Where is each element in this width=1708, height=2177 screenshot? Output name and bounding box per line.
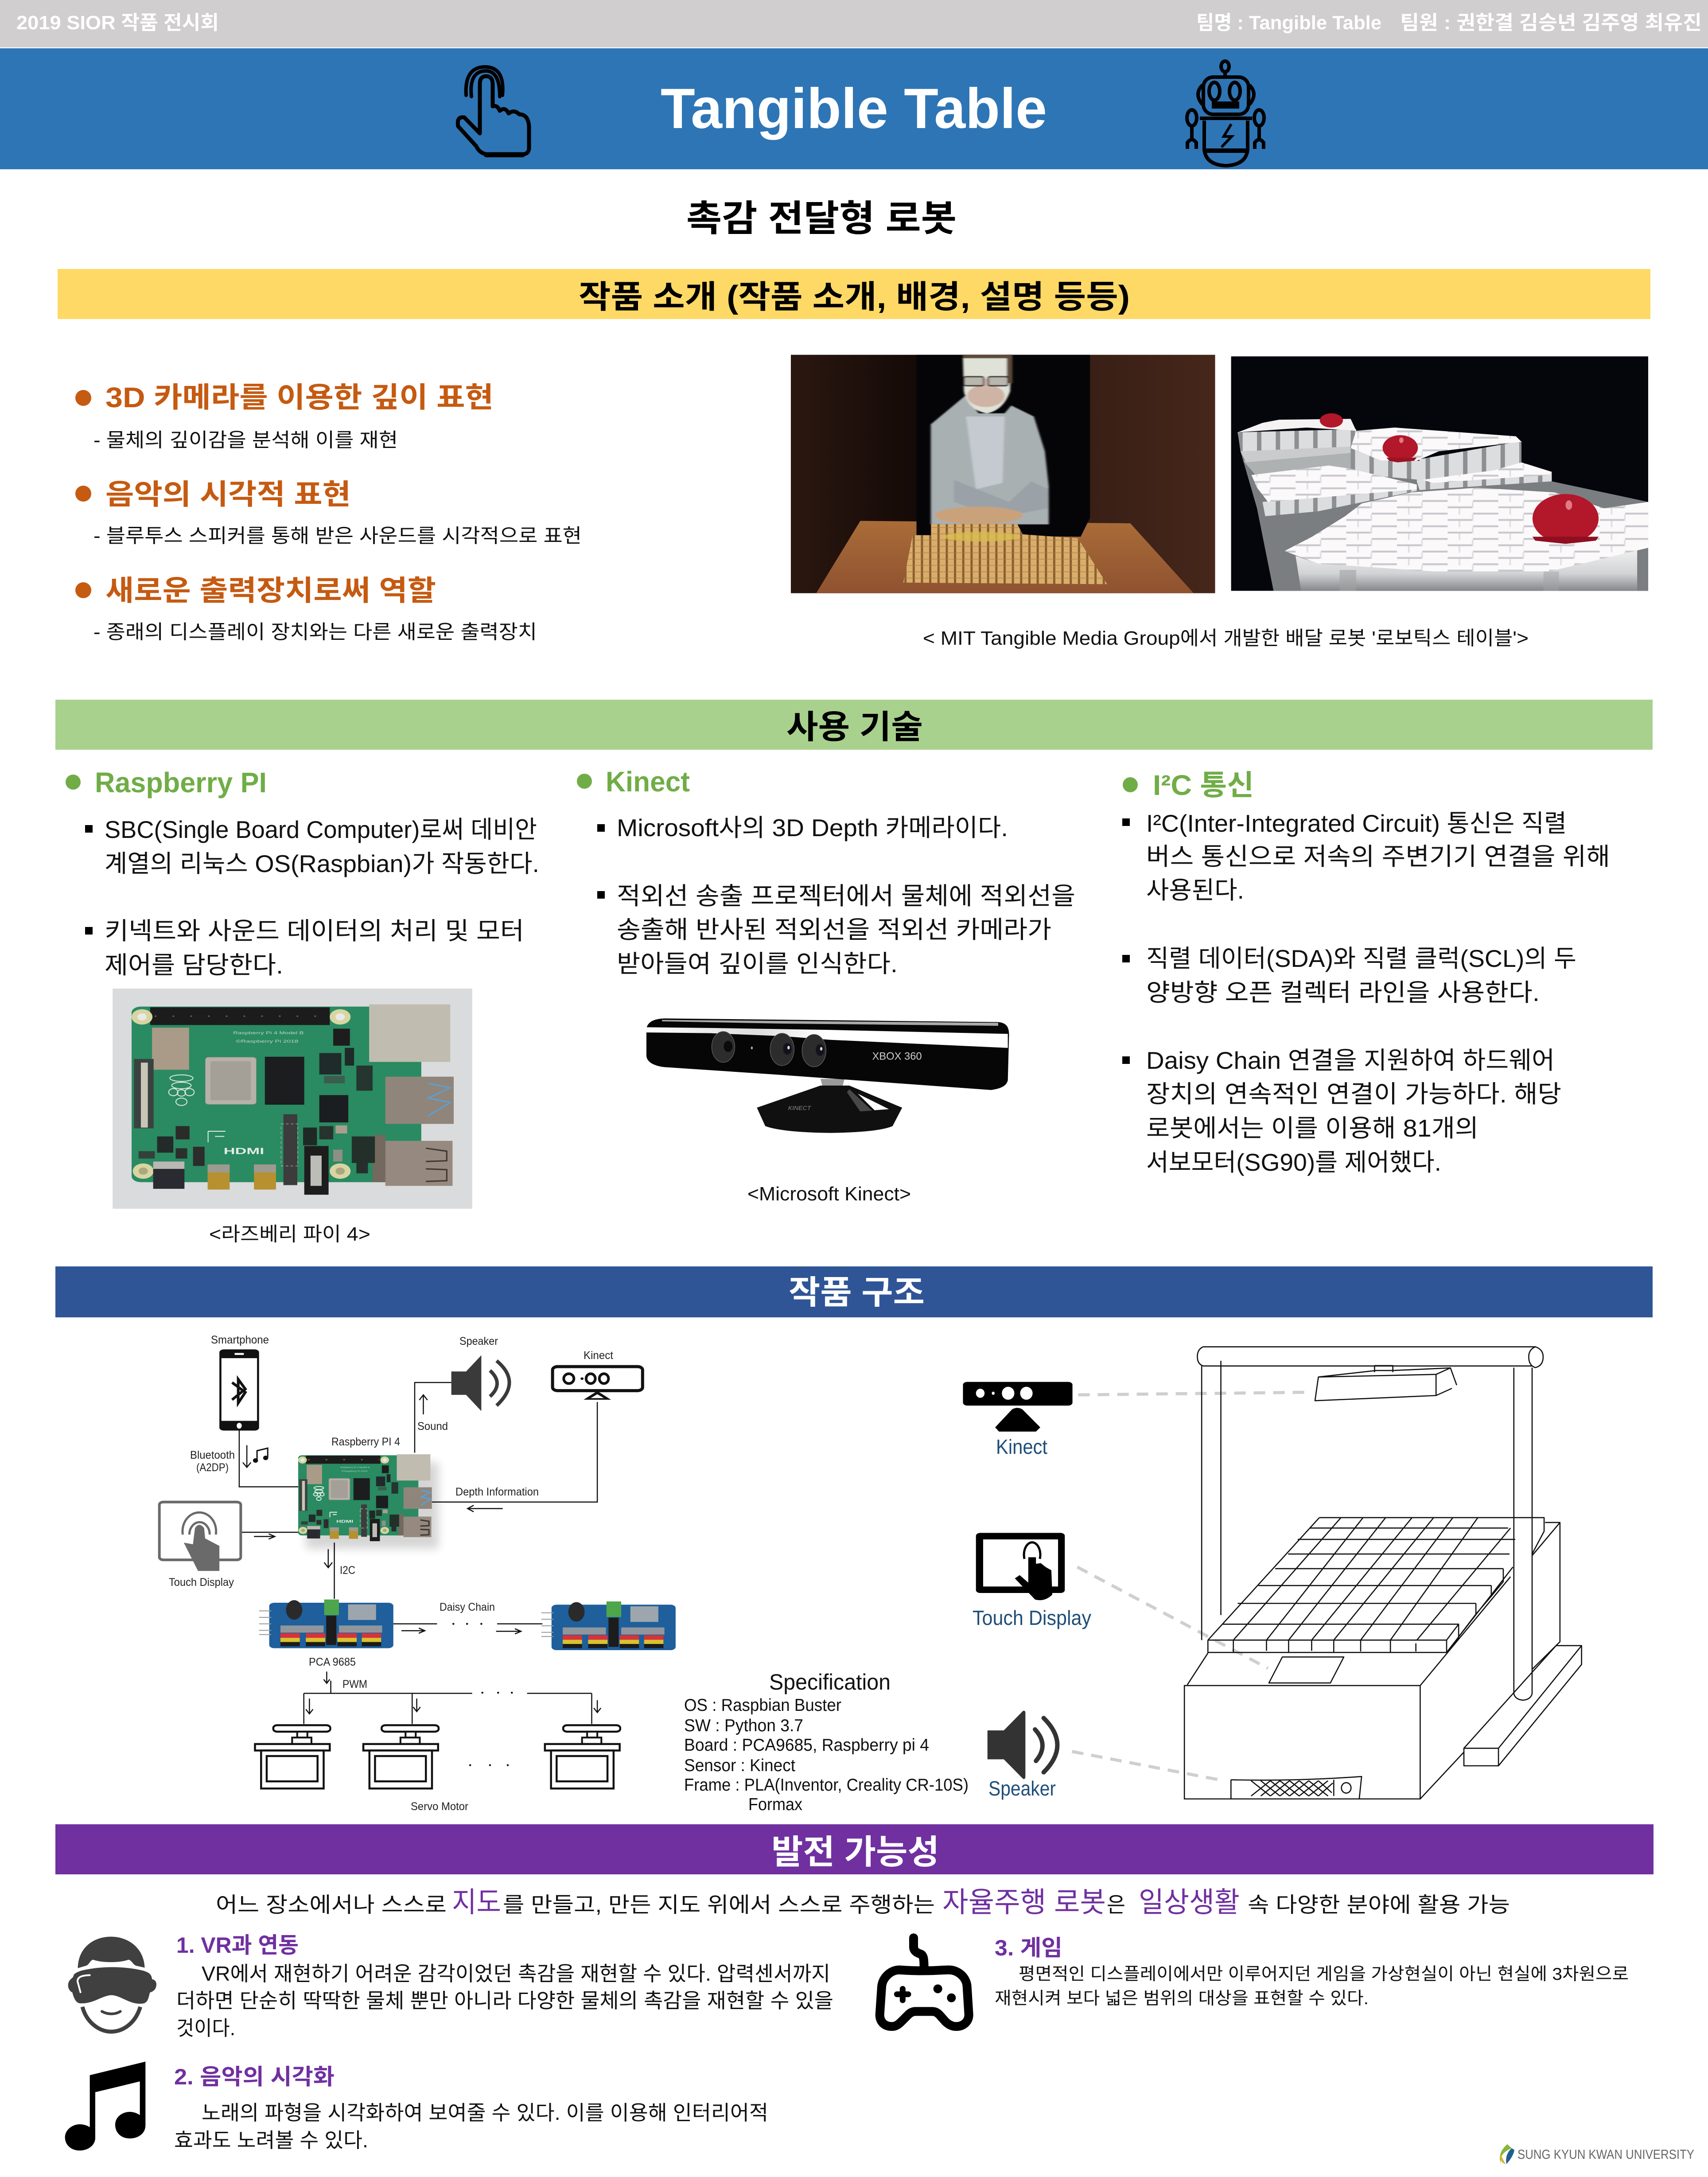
block: music visualization <box>174 2064 768 2152</box>
photo: Microsoft Kinect: XBOX 360 <box>872 1050 922 1062</box>
icon: touch display <box>160 1502 241 1571</box>
intro statement <box>216 1886 1510 1918</box>
panel: I2C column: 버스 통신으로 저속의 주변기기 연결을 위해 <box>1146 843 1610 870</box>
structure labels: Touch Display <box>973 1606 1091 1629</box>
caption: Raspberry Pi: <라즈베리 파이 4> <box>209 1223 370 1245</box>
panel: I2C column: 로봇에서는 이를 이용해 81개의 <box>1146 1114 1478 1142</box>
panel: feature list: 새로운 출력장치로써 역할 <box>105 575 436 607</box>
robot structure sketch <box>963 1347 1582 1799</box>
photo: Microsoft Kinect <box>646 1018 1009 1133</box>
intro statement: 를 만들고, 만든 지도 위에서 스스로 주행하는 <box>503 1893 935 1917</box>
intro statement: 어느 장소에서나 스스로 <box>216 1893 447 1917</box>
block: game <box>995 1936 1629 2008</box>
panel: I2C column: 양방향 오픈 컬렉터 라인을 사용한다. <box>1146 979 1540 1006</box>
diagram labels: Sound <box>417 1420 448 1433</box>
structure labels <box>973 1435 1091 1800</box>
diagram labels: Servo Motor <box>411 1800 468 1813</box>
intro statement: 속 다양한 분야에 활용 가능 <box>1248 1893 1510 1917</box>
panel: feature list <box>75 382 582 643</box>
block: VR integration: 것이다. <box>176 2017 235 2040</box>
panel: feature list: 음악의 시각적 표현 <box>105 479 351 510</box>
panel: Raspberry PI column: 계열의 리눅스 OS(Raspbian)가 작동한다. <box>105 850 539 877</box>
panel: Raspberry PI column: 제어를 담당한다. <box>105 951 283 979</box>
diagram labels: Speaker <box>459 1335 498 1347</box>
panel: I2C column: 서보모터(SG90)를 제어했다. <box>1146 1149 1441 1176</box>
panel: structure heading <box>55 1266 1653 1317</box>
top info bar: 2019 SIOR 작품 전시회 <box>16 12 219 34</box>
panel: I2C column: 직렬 데이터(SDA)와 직렬 클럭(SCL)의 두 <box>1146 945 1576 972</box>
servo motors <box>255 1725 620 1788</box>
callout icon: speaker <box>988 1711 1057 1779</box>
panel: Kinect column <box>577 766 1075 978</box>
panel: Raspberry PI column: SBC(Single Board Computer)로써 데비안 <box>105 816 537 843</box>
block: game: 평면적인 디스플레이에서만 이루어지던 게임을 가상현실이 아닌 현실에 3차원으로 <box>1019 1965 1629 1984</box>
intro statement: 지도 <box>452 1886 501 1918</box>
block: music visualization: 노래의 파형을 시각화하여 보여줄 수 있다. 이를 이용해 인터리어적 <box>202 2101 768 2124</box>
ellipsis dots <box>452 1623 513 1766</box>
panel: I2C column <box>1122 769 1610 1176</box>
dashed leader lines <box>1072 1392 1309 1780</box>
panel: I2C column: 장치의 연속적인 연결이 가능하다. 해당 <box>1146 1080 1561 1108</box>
panel: introduction heading: 작품 소개 (작품 소개, 배경, 설명 등등) <box>579 280 1130 315</box>
title banner <box>0 48 1708 169</box>
system block diagram <box>160 1334 676 1813</box>
icon: speaker <box>451 1355 510 1411</box>
icon: VR head <box>68 1937 156 2032</box>
photo: man with shape display <box>791 355 1215 593</box>
icon: game controller <box>880 1938 969 2026</box>
diagram labels: PWM <box>342 1678 367 1690</box>
panel: feature list: - 종래의 디스플레이 장치와는 다른 새로운 출력장치 <box>93 621 537 643</box>
specification text: Sensor : Kinect <box>684 1756 795 1775</box>
diagram labels: Smartphone <box>211 1334 269 1346</box>
icon: smartphone <box>219 1349 259 1431</box>
panel: Kinect column: 받아들여 깊이를 인식한다. <box>617 950 898 978</box>
block: VR integration: 1. VR과 연동 <box>176 1933 299 1958</box>
diagram labels: Raspberry PI 4 <box>331 1436 400 1448</box>
panel: Raspberry PI column <box>66 767 539 979</box>
specification text: Specification <box>769 1670 891 1694</box>
specification text: Frame : PLA(Inventor, Creality CR-10S) <box>684 1776 969 1795</box>
panel: Kinect column: Kinect <box>606 766 690 798</box>
diagram labels: Bluetooth <box>190 1449 235 1461</box>
top info bar <box>0 0 1708 47</box>
diagram labels: I2C <box>340 1564 355 1577</box>
title text: Tangible Table <box>661 77 1047 140</box>
subtitle: 촉감 전달형 로봇 <box>686 199 957 239</box>
panel: future potential heading: 발전 가능성 <box>771 1834 939 1871</box>
panel: technology heading: 사용 기술 <box>786 709 923 745</box>
intro statement: 자율주행 로봇 <box>942 1886 1106 1918</box>
panel: I2C column: Daisy Chain 연결을 지원하여 하드웨어 <box>1146 1047 1555 1074</box>
panel: I2C column: 사용된다. <box>1146 876 1244 904</box>
icon: touch hand <box>458 67 529 155</box>
panel: introduction heading <box>58 269 1650 319</box>
PCA boards <box>259 1600 676 1650</box>
panel: Kinect column: 송출해 반사된 적외선을 적외선 카메라가 <box>617 916 1051 943</box>
diagram labels: PCA 9685 <box>309 1656 356 1668</box>
photo: Raspberry Pi 4 <box>113 989 472 1209</box>
panel: Raspberry PI column: 키넥트와 사운드 데이터의 처리 및 모터 <box>105 917 524 945</box>
structure labels: Kinect <box>996 1435 1047 1458</box>
top info bar: 팀명 : Tangible Table <box>1196 12 1381 34</box>
block: VR integration <box>176 1933 833 2040</box>
sketch drawing <box>1184 1347 1582 1799</box>
specification text <box>684 1670 969 1814</box>
photo: Microsoft Kinect: KINECT <box>788 1105 812 1111</box>
diagram labels: Depth Information <box>455 1486 539 1498</box>
block: VR integration: 더하면 단순히 딱딱한 물체 뿐만 아니라 다양한 물체의 촉감을 재현할 수 있을 <box>176 1989 833 2012</box>
block: VR integration: VR에서 재현하기 어려운 감각이었던 촉감을 재현할 수 있다. 압력센서까지 <box>202 1962 830 1985</box>
diagram labels: (A2DP) <box>196 1461 229 1474</box>
icon: robot <box>1187 61 1264 166</box>
block: game: 재현시켜 보다 넓은 범위의 대상을 표현할 수 있다. <box>995 1989 1369 2008</box>
panel: feature list: - 물체의 깊이감을 분석해 이를 재현 <box>93 429 398 451</box>
panel: Kinect column: 적외선 송출 프로젝터에서 물체에 적외선을 <box>617 882 1075 910</box>
panel: feature list: - 블루투스 스피커를 통해 받은 사운드를 시각적으로 표현 <box>93 525 582 547</box>
panel: technology heading <box>55 700 1653 750</box>
connector lines <box>239 1383 597 1724</box>
diagram labels: Daisy Chain <box>440 1601 495 1613</box>
panel: I2C column: I²C 통신 <box>1153 769 1254 801</box>
diagram labels: Kinect <box>584 1349 613 1362</box>
panel: I2C column: I²C(Inter-Integrated Circuit) 통신은 직렬 <box>1146 810 1567 837</box>
logo: Sungkyunkwan University <box>1500 2144 1694 2164</box>
block: music visualization: 효과도 노려볼 수 있다. <box>174 2129 368 2152</box>
photo: white pin terrain with red balls <box>1231 356 1648 591</box>
specification text: SW : Python 3.7 <box>684 1716 803 1735</box>
icon: music notes <box>65 2062 145 2150</box>
specification text: OS : Raspbian Buster <box>684 1696 841 1715</box>
intro statement: 은 <box>1107 1893 1125 1917</box>
caption: Kinect: <Microsoft Kinect> <box>747 1183 911 1205</box>
callout icon: kinect <box>963 1382 1073 1432</box>
structure labels: Speaker <box>988 1777 1056 1800</box>
caption: MIT photos: < MIT Tangible Media Group에서 개발한 배달 로봇 '로보틱스 테이블'> <box>923 627 1529 649</box>
icon: music note <box>253 1448 268 1463</box>
panel: feature list: 3D 카메라를 이용한 깊이 표현 <box>105 382 494 413</box>
diagram connectors and icons <box>160 1349 642 1766</box>
Raspberry Pi board <box>298 1454 432 1541</box>
specification text: Board : PCA9685, Raspberry pi 4 <box>684 1736 929 1755</box>
diagram labels <box>169 1334 613 1813</box>
block: music visualization: 2. 음악의 시각화 <box>174 2064 335 2089</box>
icon: kinect outline <box>552 1367 642 1400</box>
intro statement: 일상생활 <box>1139 1886 1240 1918</box>
callout icon: touch display <box>976 1533 1065 1600</box>
diagram labels: Touch Display <box>169 1576 234 1589</box>
shadow under Raspberry Pi <box>306 1462 439 1549</box>
direction arrows <box>243 1395 601 1714</box>
panel: future potential heading <box>55 1824 1654 1874</box>
top info bar: 팀원 : 권한결 김승년 김주영 최유진 <box>1400 12 1702 34</box>
panel: Raspberry PI column: Raspberry PI <box>95 767 267 798</box>
specification text: Formax <box>748 1795 802 1814</box>
panel: Kinect column: Microsoft사의 3D Depth 카메라이다. <box>617 814 1008 841</box>
block: game: 3. 게임 <box>995 1936 1062 1960</box>
panel: structure heading: 작품 구조 <box>789 1274 925 1311</box>
